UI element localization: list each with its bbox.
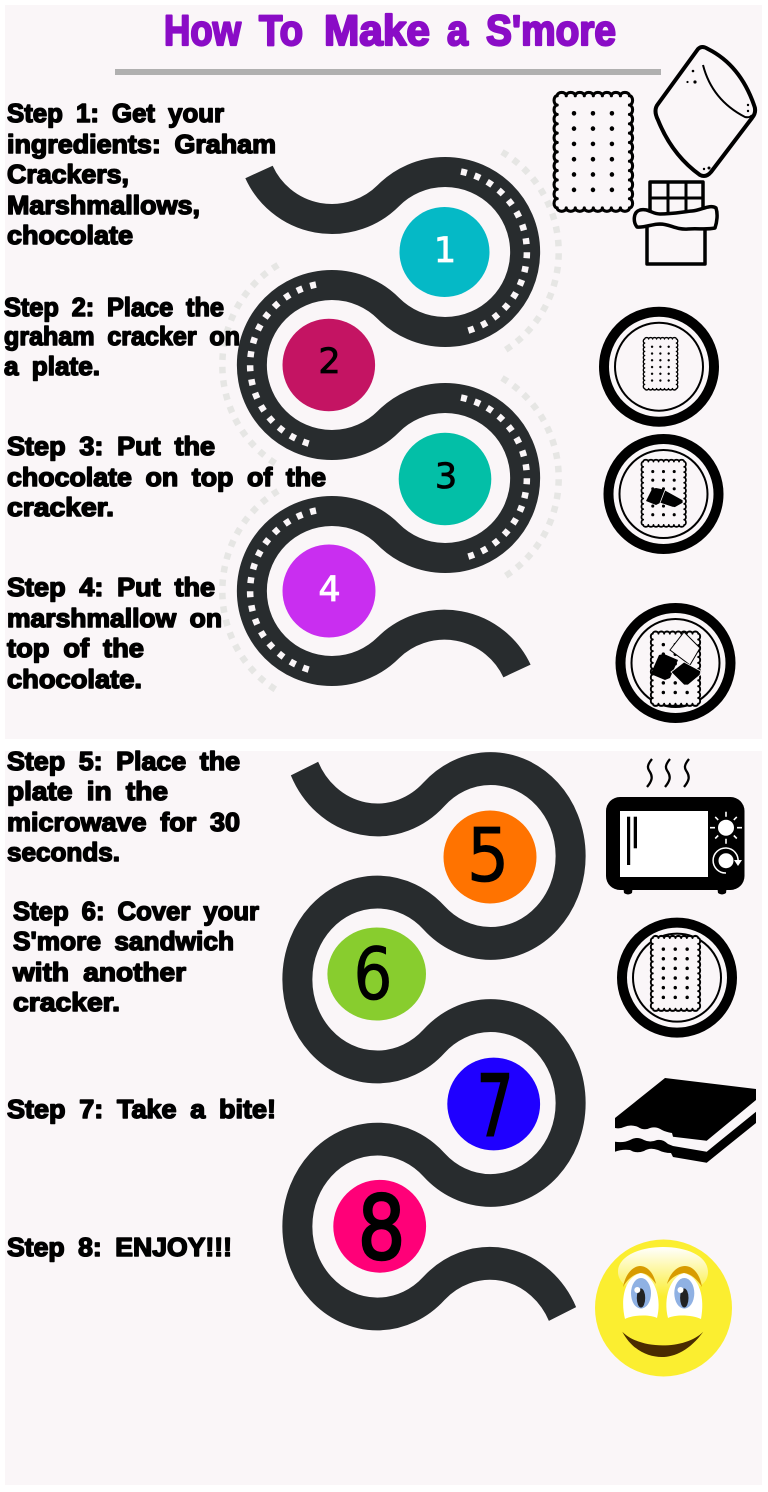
text: step 1: ingredients: Graham <box>7 129 276 159</box>
text: step 5: Step 5: Place the <box>7 746 240 776</box>
text: step 3: Step 3: Put the <box>7 431 215 461</box>
text: step 5: plate in the <box>7 776 168 806</box>
text: step 5 <box>7 746 240 867</box>
icon: smiley face <box>595 1240 732 1376</box>
step badge 7: 7 <box>477 1057 513 1155</box>
text: step 3: cracker. <box>7 492 114 522</box>
icon: microwave <box>606 759 744 894</box>
icon: plate with cracker and chocolate <box>608 439 718 549</box>
icon: marshmallow <box>656 47 755 176</box>
step badge 2: 2 <box>318 342 341 382</box>
text: step 7: Step 7: Take a bite! <box>7 1094 276 1124</box>
title: To <box>259 7 303 55</box>
text: step 2: a plate. <box>4 351 100 381</box>
text: step 4: top of the <box>7 633 144 663</box>
text: step 1: Marshmallows, <box>7 190 200 220</box>
text: step 2: Step 2: Place the <box>4 292 224 322</box>
text: step 4 <box>7 572 222 694</box>
step badge 4 <box>282 544 376 638</box>
title: S'more <box>486 7 616 55</box>
text: step 2: graham cracker on <box>4 321 240 351</box>
text: step 5: seconds. <box>7 837 120 867</box>
step badge 1: 1 <box>434 231 456 271</box>
icon: chocolate bar <box>634 182 717 264</box>
text: step 6 <box>12 896 259 1017</box>
light grey dotted arcs <box>222 152 559 691</box>
step badge 2 <box>282 319 375 411</box>
step badge 5: 5 <box>467 813 509 899</box>
icon: bitten sandwich <box>615 1078 756 1163</box>
text: step 5: microwave for 30 <box>7 807 240 837</box>
panel: upper background <box>5 5 762 739</box>
title <box>164 7 616 55</box>
step badge 6: 6 <box>354 932 392 1016</box>
winding track: steps 1-4 <box>252 172 525 671</box>
step badge 8: 8 <box>358 1178 405 1281</box>
panel: lower background <box>5 751 762 1485</box>
title: How <box>164 7 241 55</box>
icon: graham cracker <box>554 92 633 211</box>
text: step 6: Step 6: Cover your <box>13 896 259 926</box>
text: step 4: chocolate. <box>7 664 142 694</box>
winding track: steps 5-8 <box>297 769 571 1314</box>
text: step 6: cracker. <box>13 987 120 1017</box>
text: step 3: chocolate on top of the <box>7 462 326 492</box>
text: step 4: Step 4: Put the <box>7 572 215 602</box>
text: step 6: with another <box>12 957 186 987</box>
white road dashes <box>250 172 527 671</box>
text: step 6: S'more sandwich <box>13 926 234 956</box>
text: step 3 <box>7 431 326 522</box>
step badge 7 <box>447 1057 540 1155</box>
step badge 6 <box>327 928 426 1020</box>
title: a <box>447 7 469 55</box>
text: step 8: Step 8: ENJOY!!! <box>7 1232 232 1262</box>
title divider rule <box>115 69 661 75</box>
step badge 5 <box>444 810 536 904</box>
title: Make <box>324 7 430 55</box>
text: step 2 <box>4 292 240 381</box>
text: step 1: Step 1: Get your <box>7 98 224 128</box>
step badge 3: 3 <box>435 457 457 497</box>
step badge 1 <box>400 207 490 297</box>
step text blocks <box>4 98 326 1262</box>
text: step 1: Crackers, <box>7 159 129 189</box>
icon: plate with cracker <box>604 312 714 422</box>
step badge 4: 4 <box>318 570 341 610</box>
icon: plate with cracker, chocolate and marshmallow <box>620 608 730 718</box>
step badge 8 <box>333 1178 426 1281</box>
text: step 1: chocolate <box>7 220 133 250</box>
text: step 1 <box>7 98 276 250</box>
icon: plate with top cracker <box>622 923 732 1033</box>
text: step 4: marshmallow on <box>7 603 222 633</box>
step badge 3 <box>399 433 491 525</box>
